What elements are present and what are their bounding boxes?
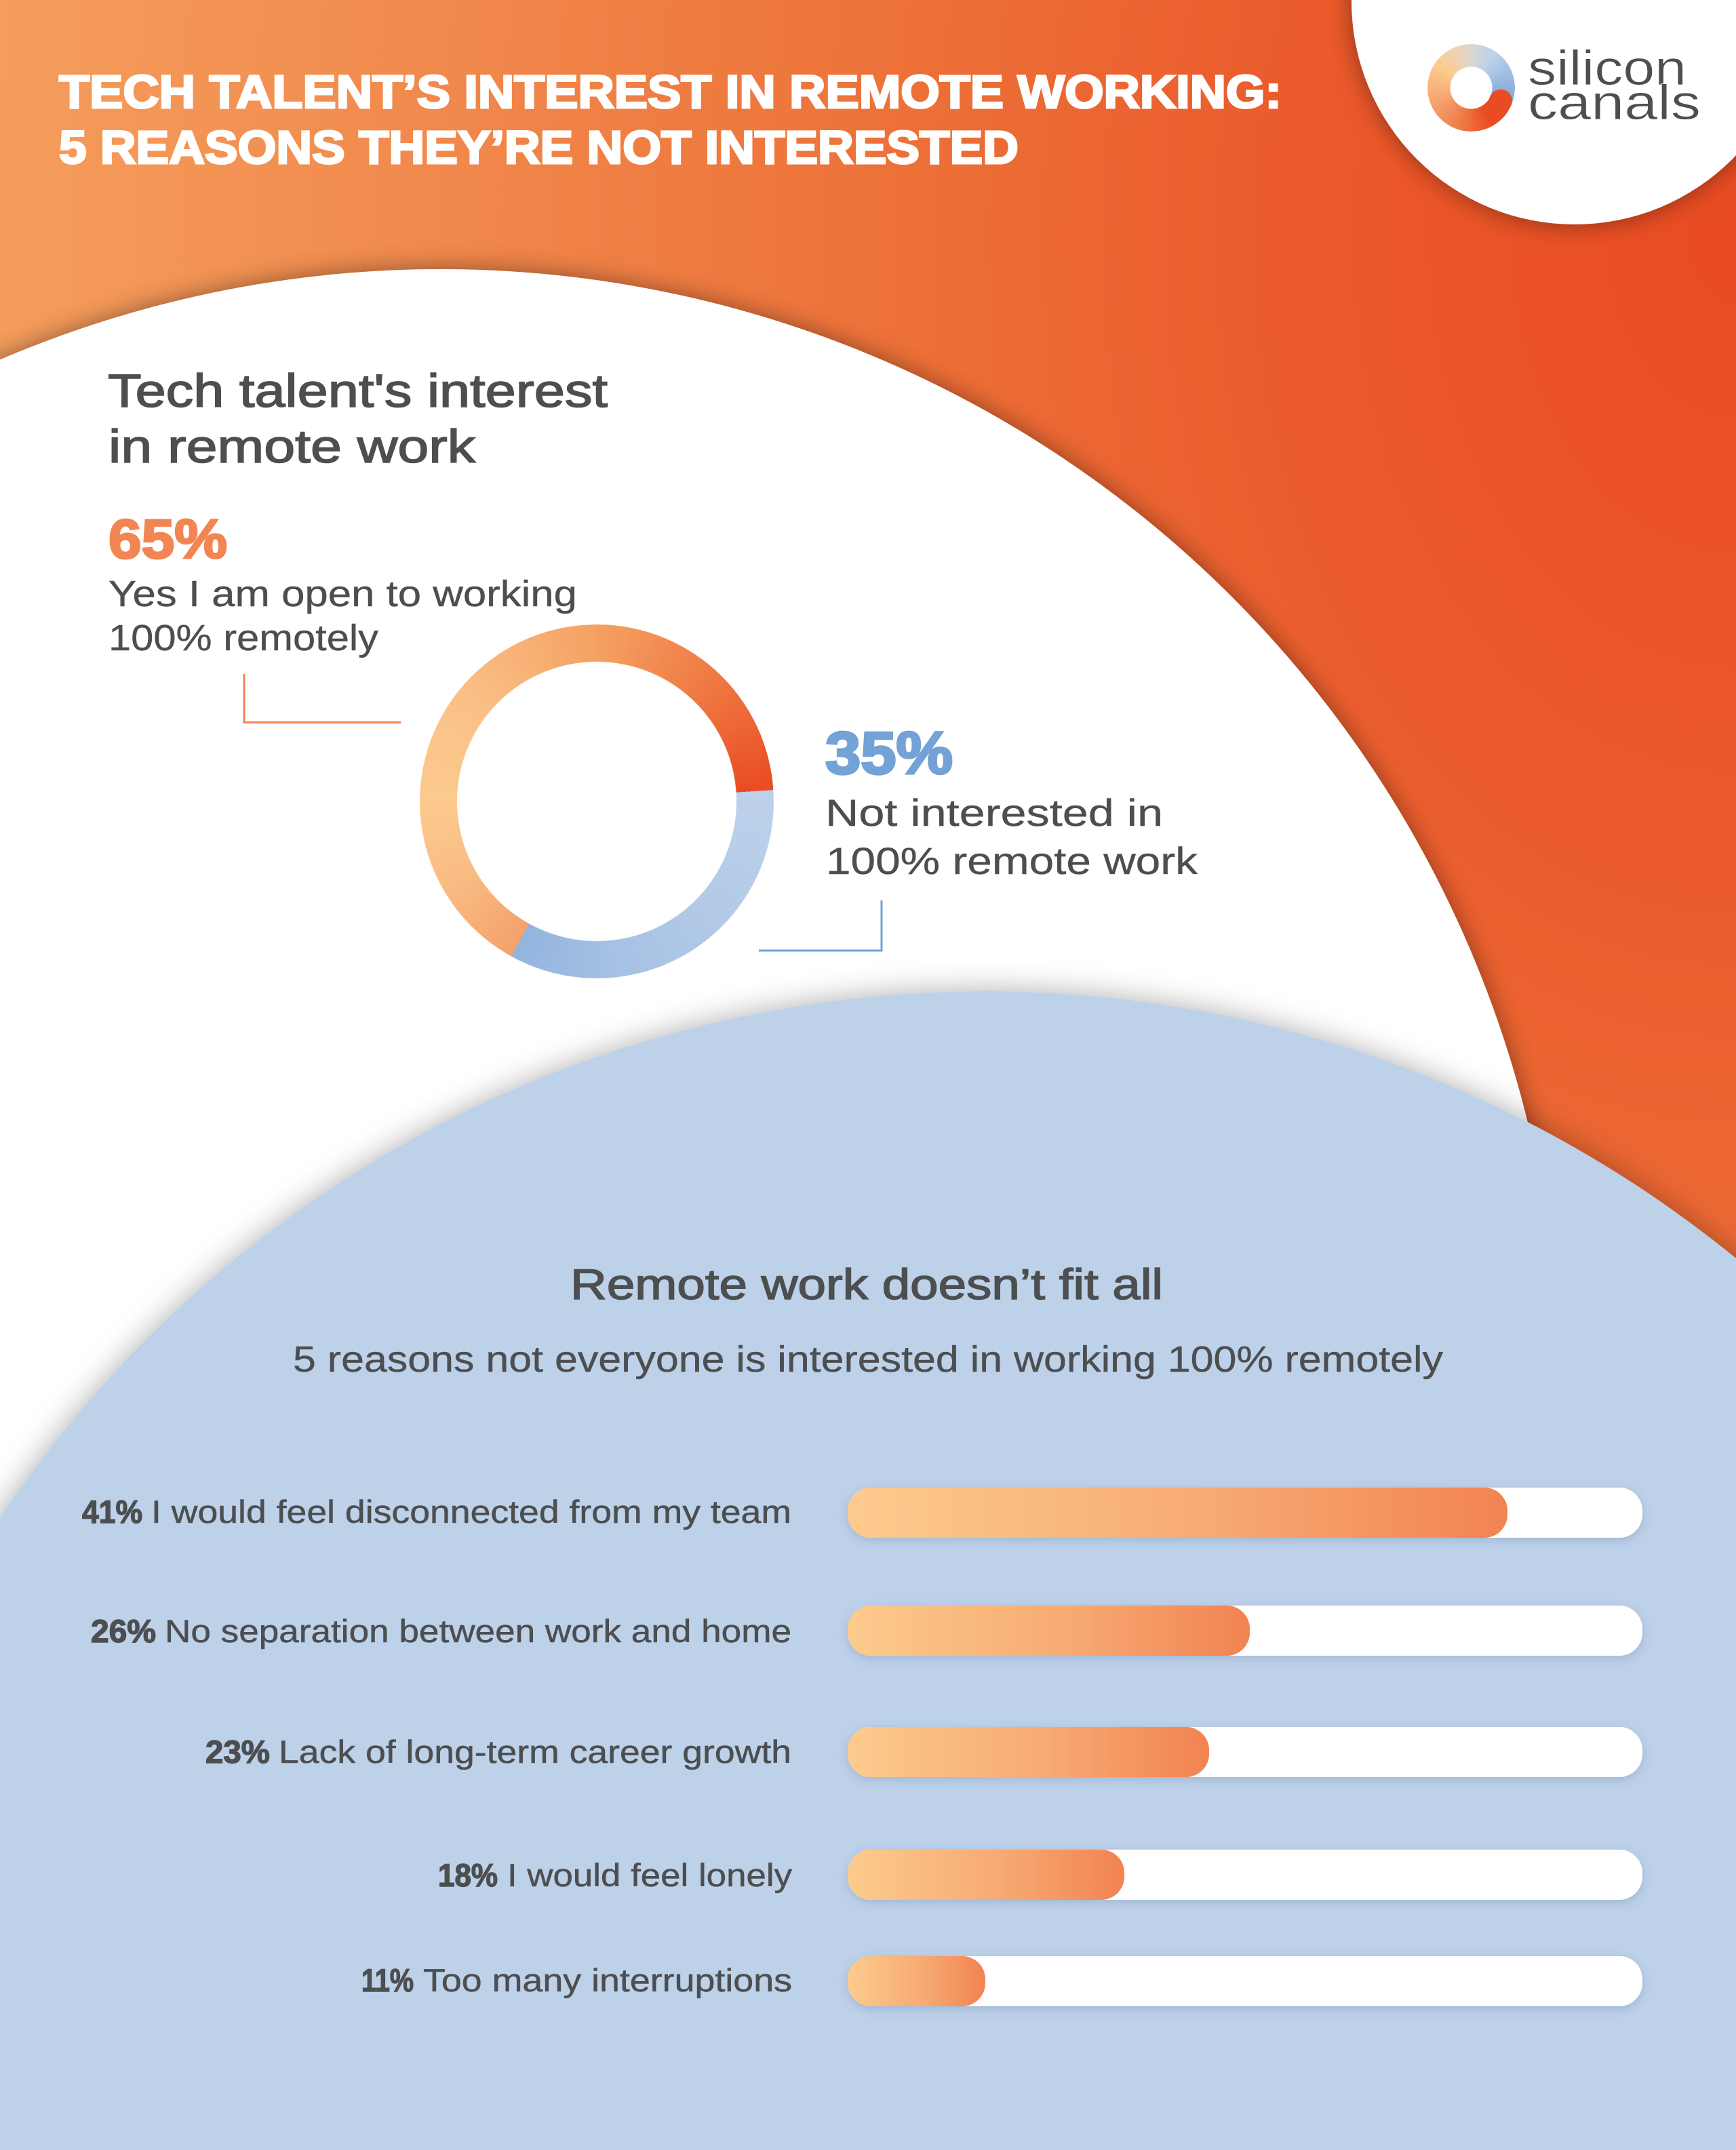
label: 26 percent: No separation between work and home (165, 1613, 791, 1649)
logo wordmark (1528, 41, 1701, 130)
label: 11 percent: 11% (361, 1962, 414, 1998)
logo ring rounded end (1489, 89, 1512, 112)
donut chart: 65 percent and 35 percent (420, 624, 774, 978)
text: open to working remotely: 100% remotely (108, 618, 378, 658)
stat: 35 percent: 35% (825, 719, 953, 787)
stat: 65 percent: 65% (108, 509, 227, 570)
text: open to working remotely: Yes I am open to working (108, 574, 577, 614)
label: 41 percent: 41% (82, 1494, 142, 1530)
logo ring (1427, 43, 1515, 132)
bar: 18 percent (848, 1850, 1642, 1900)
bar: 26 percent (848, 1606, 1642, 1656)
label: 41 percent: I would feel disconnected from my team (151, 1494, 791, 1530)
logo white circle (1352, 0, 1736, 224)
bar: 23 percent (848, 1727, 1642, 1777)
text: not interested in remote work: Not interested in (825, 791, 1163, 834)
panel: blue reasons circle (0, 991, 1736, 2150)
callout line: orange (244, 674, 401, 723)
text: not interested in remote work: 100% remote work (826, 839, 1198, 882)
callout line: blue (759, 900, 882, 951)
label: 18 percent: 18% (438, 1857, 498, 1893)
label: 18 percent: I would feel lonely (507, 1857, 793, 1893)
subheading: 5 reasons not everyone is interested in working 100% remotely (293, 1339, 1443, 1380)
heading: tech talent's interest (108, 365, 608, 473)
logo wordmark: canals (1528, 76, 1701, 130)
heading: tech talent's interest: Tech talent's interest (108, 365, 608, 417)
title: 5 REASONS THEY’RE NOT INTERESTED (59, 121, 1019, 174)
panel: white chart circle (0, 269, 1533, 2150)
label: 23 percent: 23% (205, 1734, 270, 1770)
label: 11 percent: Too many interruptions (423, 1962, 792, 1998)
label: 26 percent: 26% (91, 1613, 156, 1649)
bar: 11 percent (848, 1956, 1642, 2006)
bar: 41 percent (848, 1488, 1642, 1538)
label: 23 percent: Lack of long-term career growth (279, 1734, 791, 1770)
text: open to working remotely (108, 574, 577, 658)
logo: silicon canals (1427, 41, 1701, 132)
title (59, 66, 1282, 174)
logo wordmark: silicon (1528, 41, 1686, 96)
heading: tech talent's interest: in remote work (108, 420, 476, 473)
title: TECH TALENT’S INTEREST IN REMOTE WORKING: (59, 66, 1282, 118)
text: not interested in remote work (825, 791, 1198, 882)
heading: remote work doesn't fit all: Remote work doesn’t fit all (570, 1261, 1163, 1309)
